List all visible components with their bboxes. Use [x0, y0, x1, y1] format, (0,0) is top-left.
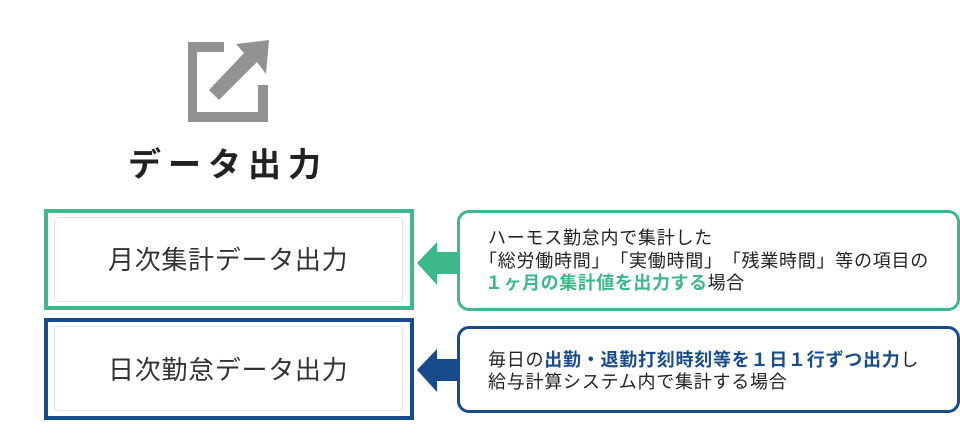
panel: daily description: [457, 326, 960, 413]
panel: monthly output: [44, 209, 414, 310]
button: monthly: [54, 217, 403, 302]
panel: daily output: [44, 318, 414, 420]
text: monthly line 2: 「総労働時間」「実働時間」「残業時間」等の項目の: [479, 251, 929, 271]
text: daily line 1: 毎日の出勤・退勤打刻時刻等を１日１行ずつ出力し: [488, 350, 919, 370]
text: monthly line 3: １ヶ月の集計値を出力する場合: [485, 273, 745, 293]
text: daily line 2: 給与計算システム内で集計する場合: [488, 372, 787, 392]
button: daily: [54, 326, 403, 411]
arrow: green: [417, 242, 457, 285]
arrow: blue: [417, 349, 457, 392]
title: データ出力: [128, 146, 328, 183]
button label: daily: 日次勤怠データ出力: [108, 355, 348, 385]
icon: export arrow: [188, 40, 269, 122]
button label: monthly: 月次集計データ出力: [108, 245, 348, 275]
panel: monthly description: [457, 210, 960, 311]
text: monthly line 1: ハーモス勤怠内で集計した: [488, 228, 713, 248]
